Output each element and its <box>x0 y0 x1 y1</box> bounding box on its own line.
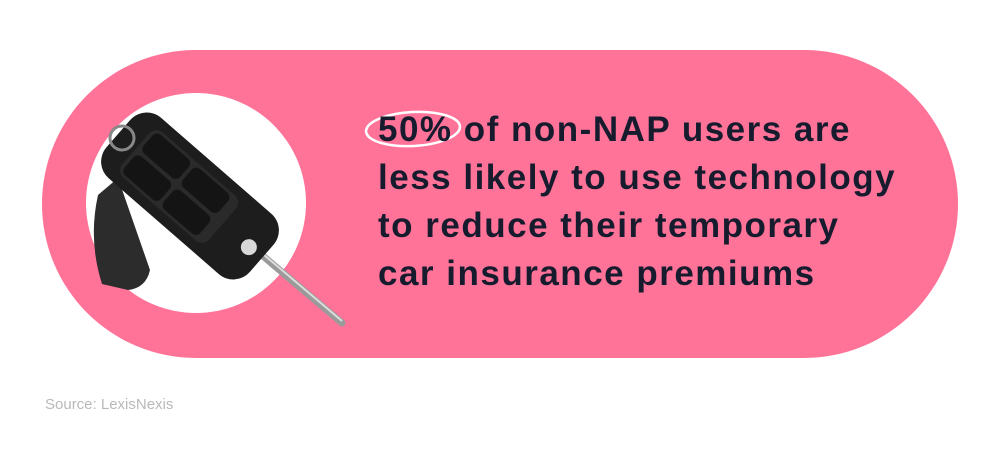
text block: statistic: less likely to use technology <box>378 158 896 197</box>
icon: key blade <box>250 243 342 323</box>
text block: statistic: to reduce their temporary <box>378 206 840 245</box>
icon: key body <box>92 103 288 289</box>
icon: fob side piece <box>94 178 150 290</box>
callout: scribble ellipse around 50% <box>365 110 461 148</box>
text block: statistic: car insurance premiums <box>378 254 816 293</box>
panel: pink pill <box>42 50 958 358</box>
source note: Source: LexisNexis <box>45 396 173 413</box>
icon: key ring <box>110 126 134 150</box>
text block: statistic <box>378 110 896 293</box>
text block: statistic: 50% of non-NAP users are <box>378 110 851 149</box>
